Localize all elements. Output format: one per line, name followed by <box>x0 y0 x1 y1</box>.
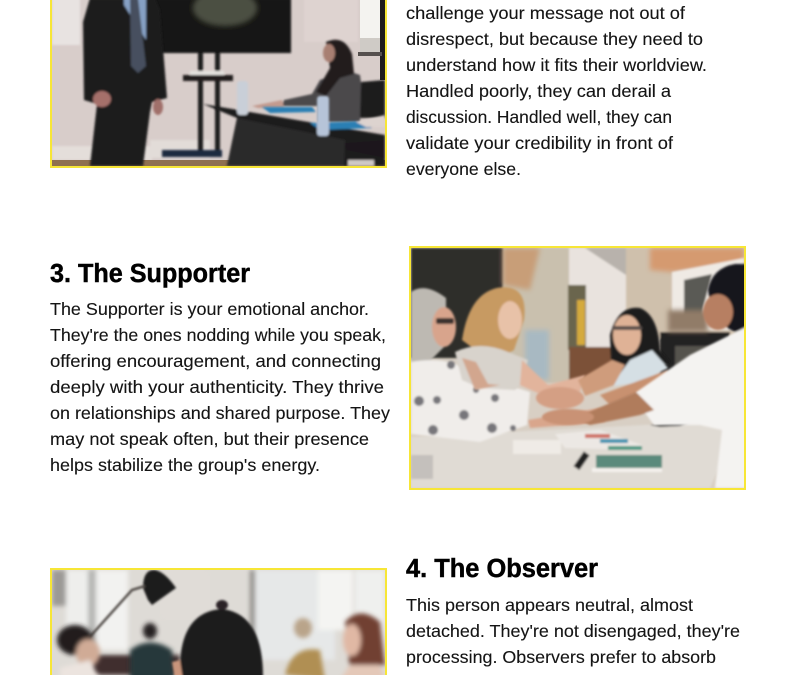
woman with curly blonde hair <box>455 287 585 394</box>
heading: 3. The Supporter: 3. The Supporter <box>50 260 250 288</box>
text: supporter description: The Supporter is your emotional anchor. <box>50 299 369 319</box>
meeting table and water bottles <box>203 81 385 166</box>
text: challenger description continued: challenge your message not out of <box>406 3 685 23</box>
man in dark suit <box>83 0 167 166</box>
heading: 4. The Observer: 4. The Observer <box>406 555 598 583</box>
photo: presenter and seated woman in meeting room <box>51 0 386 168</box>
text: challenger description continued: everyone else. <box>406 159 521 179</box>
woman with white hair and polka-dot blouse <box>411 288 605 442</box>
text: observer description: This person appears neutral, almost <box>406 595 693 615</box>
blurred people in background <box>57 614 385 675</box>
text: challenger description continued: understand how it fits their worldview. <box>406 55 707 75</box>
window background <box>52 570 385 675</box>
presentation screen on stand <box>150 0 291 157</box>
woman's head from behind <box>172 600 263 675</box>
text: supporter description <box>50 299 390 475</box>
text: supporter description: They're the ones nodding while you speak, <box>50 325 386 345</box>
desk lamp <box>89 570 178 638</box>
woman in white shirt reaching in from right <box>575 264 748 488</box>
text: observer description <box>406 595 740 667</box>
stacked hands <box>536 387 594 425</box>
text: supporter description: helps stabilize the group's energy. <box>50 455 320 475</box>
text: supporter description: deeply with your authenticity. They thrive <box>50 377 384 397</box>
text: supporter description: offering encouragement, and connecting <box>50 351 381 371</box>
room background <box>411 248 744 383</box>
text: challenger description continued: validate your credibility in front of <box>406 133 673 153</box>
text: observer description: detached. They're not disengaged, they're <box>406 621 740 641</box>
woman with black hair and glasses <box>578 308 670 405</box>
text: supporter description: on relationships and shared purpose. They <box>50 403 390 423</box>
text: challenger description continued: discussion. Handled well, they can <box>406 107 672 127</box>
photo: four women stacking hands at a table <box>410 247 748 489</box>
text: challenger description continued <box>406 3 707 179</box>
text: supporter description: may not speak often, but their presence <box>50 429 369 449</box>
text: observer description: processing. Observers prefer to absorb <box>406 647 716 667</box>
text: challenger description continued: disrespect, but because they need to <box>406 29 703 49</box>
photo: blurred meeting seen from behind a woman's head <box>51 569 386 675</box>
table surface and stationery <box>411 424 722 488</box>
text: challenger description continued: Handled poorly, they can derail a <box>406 81 671 101</box>
seated woman at the table <box>252 40 385 122</box>
